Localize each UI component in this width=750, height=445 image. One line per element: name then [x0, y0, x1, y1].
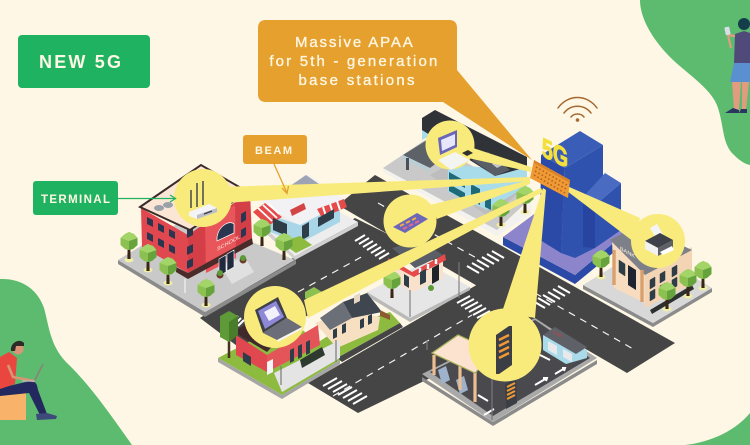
canopy pillars	[434, 355, 475, 402]
beam circle: laptop	[244, 286, 306, 348]
beams	[174, 120, 685, 382]
green blob: bottom right	[685, 413, 750, 445]
beam circle: phone	[468, 308, 542, 382]
legs	[732, 82, 749, 110]
building: gas station and car wash: CAR	[553, 329, 563, 340]
arrow: terminal to router	[118, 195, 176, 202]
label: TERMINAL	[33, 181, 118, 215]
school label: SCHOOL	[217, 234, 241, 253]
label: NEW 5G: NEW 5G	[39, 52, 121, 72]
building: small red house	[218, 311, 340, 399]
office dark roof	[422, 110, 527, 176]
torso	[0, 352, 17, 389]
5G base station tower	[503, 131, 635, 284]
icon: router	[189, 181, 217, 219]
green blob: top right	[640, 0, 750, 165]
road dashes	[298, 203, 635, 396]
building: office	[383, 110, 531, 236]
icon: wifi	[558, 98, 597, 122]
callout: Massive APAA: Massive APAA	[295, 34, 413, 51]
callout: Massive APAA: for 5th - generation	[269, 53, 437, 70]
street lamp	[281, 340, 336, 385]
building: bank: BANK	[620, 246, 635, 260]
beam circle: router	[174, 169, 232, 227]
crosswalks	[232, 235, 570, 404]
head	[738, 18, 750, 30]
orange seat	[0, 392, 26, 420]
label: BEAM: BEAM	[255, 145, 292, 157]
beam to router	[218, 177, 530, 203]
icon: smartphone	[496, 326, 512, 374]
school planters	[216, 272, 224, 278]
label: NEW 5G	[18, 35, 150, 88]
shoes	[36, 413, 57, 420]
school lot	[118, 260, 296, 317]
beam to laptop	[304, 188, 543, 318]
building: school	[118, 165, 296, 317]
tall tree	[228, 340, 230, 358]
antenna array panel	[530, 160, 570, 198]
beam to calculator	[430, 180, 530, 219]
beam circle: calculator	[384, 194, 436, 248]
person: standing with phone	[724, 18, 750, 113]
beam to phone	[502, 188, 546, 318]
office rear tower	[422, 112, 437, 140]
shoes	[725, 108, 747, 113]
building: blue shop	[253, 175, 358, 260]
ground arrows	[478, 355, 565, 415]
arm	[728, 35, 735, 48]
label: BEAM	[243, 135, 307, 164]
icon: desktop computer	[438, 130, 473, 170]
building: gas station and car wash	[422, 318, 597, 426]
office canopy	[403, 140, 447, 168]
laptop	[34, 364, 43, 382]
roads	[200, 175, 675, 413]
tower plinth	[503, 225, 635, 284]
trees: around office and bank	[492, 186, 712, 311]
beam to printer	[567, 186, 640, 242]
pump islands	[438, 366, 450, 384]
icon: laptop	[255, 297, 302, 342]
trees: around school	[120, 219, 292, 307]
car wash	[543, 335, 587, 364]
icon: printer	[645, 224, 674, 256]
sign tower	[505, 378, 517, 409]
building: cottage	[305, 287, 403, 362]
phone	[724, 26, 731, 35]
arm	[8, 365, 34, 381]
arrow: beam label to beam	[274, 164, 288, 194]
beam circle: printer	[631, 214, 685, 268]
building: striped-awning cafe	[367, 240, 470, 322]
shirt	[734, 31, 750, 63]
label: TERMINAL: TERMINAL	[41, 194, 110, 206]
beam to desktop	[468, 147, 531, 172]
5G sign: 5G	[542, 132, 568, 175]
green blob: bottom left	[0, 279, 132, 445]
person: sitting with laptop	[0, 341, 57, 420]
skirt	[730, 63, 750, 82]
icon: calculator	[393, 213, 428, 233]
school windows	[147, 211, 246, 269]
school walls	[141, 208, 188, 273]
canopy	[432, 335, 495, 373]
tower main block	[540, 155, 565, 253]
beam circle: desktop	[426, 120, 474, 170]
callout: Massive APAA	[258, 20, 532, 160]
school roof	[140, 165, 248, 230]
legs	[0, 381, 47, 415]
building: bank	[583, 225, 712, 327]
tower lower block	[583, 197, 595, 248]
callout: Massive APAA: base stations	[298, 72, 414, 89]
head	[12, 344, 24, 354]
